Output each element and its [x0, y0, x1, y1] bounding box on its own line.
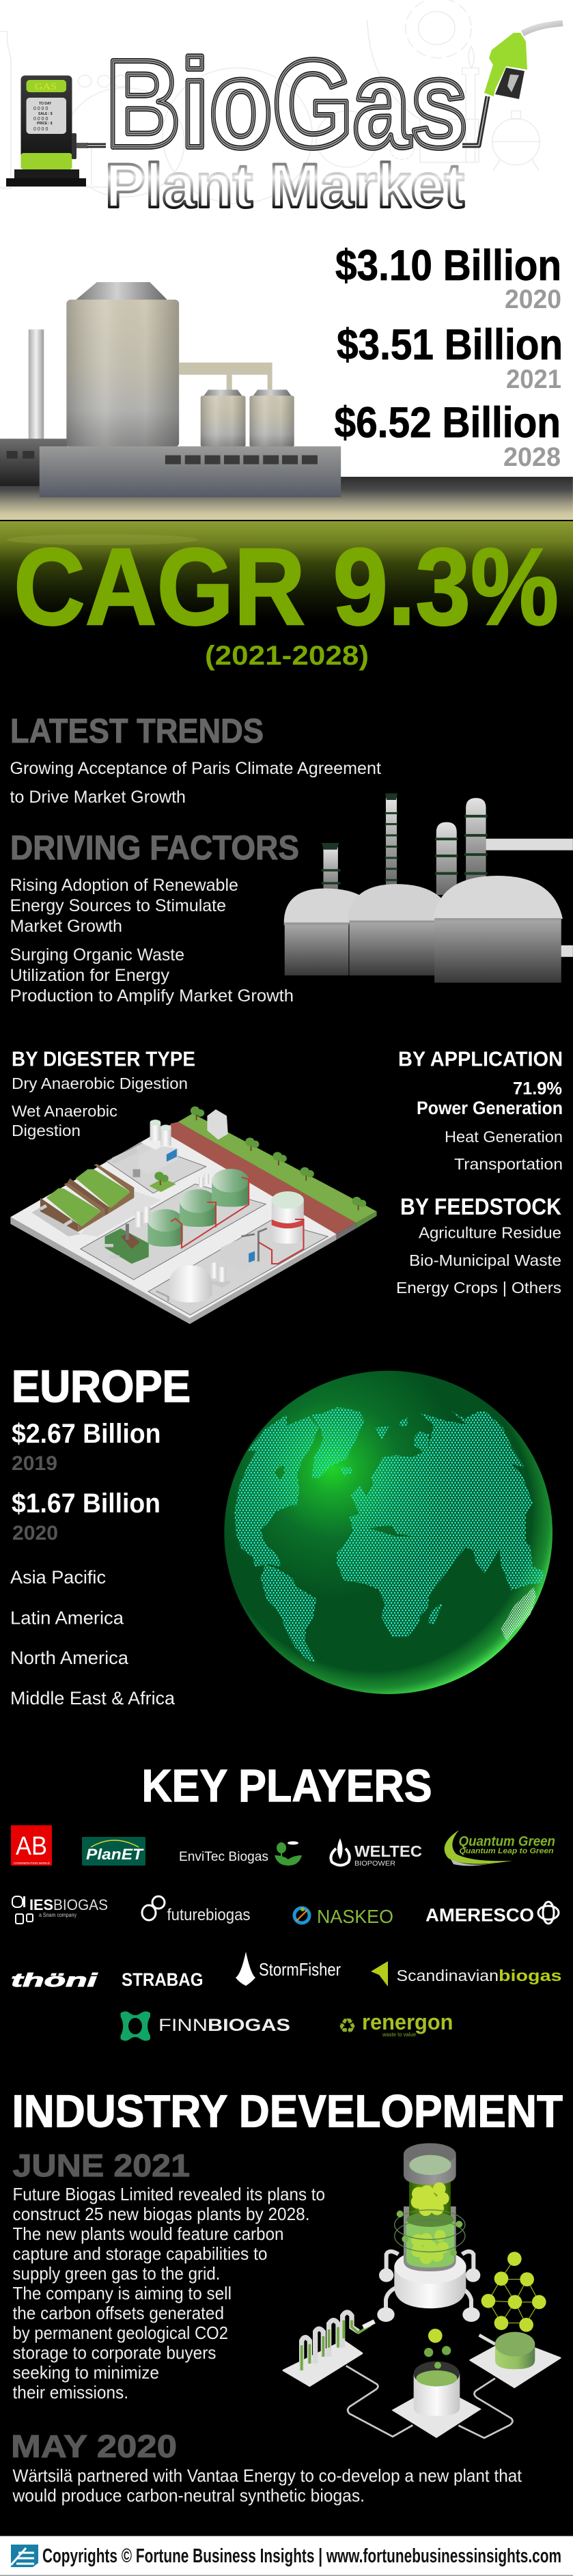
- stat: 2020 value: 2020: [505, 285, 561, 314]
- stat: Europe 2019: 2019: [12, 1452, 57, 1475]
- text: June 2021 development: [12, 2184, 325, 2402]
- logo: EnviTec Biogas: EnviTec Biogas: [179, 1850, 268, 1864]
- logo: IES Biogas: IES: [29, 1896, 53, 1913]
- logo: Quantum Green: Quantum Leap to Green: [459, 1847, 554, 1855]
- logo: Weltec Biopower: WELTEC: [354, 1842, 422, 1860]
- list: other applications: [445, 1128, 563, 1173]
- trees: [154, 1107, 366, 1210]
- list: other regions: North America: [10, 1648, 129, 1668]
- heading: by digester type: BY DIGESTER TYPE: [12, 1047, 195, 1071]
- logo: Renergon: renergon: [362, 2010, 453, 2034]
- list: feedstocks: Bio-Municipal Waste: [409, 1251, 561, 1269]
- heading: Europe: EUROPE: [12, 1361, 191, 1411]
- text: June 2021 development: storage to corporate buyers: [12, 2342, 216, 2363]
- panel: driving factors: [10, 829, 299, 1006]
- logo: StormFisher: [236, 1952, 341, 1986]
- text: June 2021 development: their emissions.: [12, 2382, 128, 2402]
- text: factor two: [10, 945, 294, 1006]
- logo: Future Biogas: futurebiogas: [167, 1906, 250, 1924]
- logo: FinnBiogas: FINN: [158, 2016, 208, 2035]
- storage tank and pipes: [156, 1191, 304, 1303]
- panel: Europe regional: [10, 1361, 191, 1708]
- beaker on plate: [391, 2329, 481, 2438]
- heading: May 2020: MAY 2020: [11, 2428, 177, 2464]
- logo: IES Biogas: BIOGAS: [53, 1896, 108, 1913]
- heading: latest trends: LATEST TRENDS: [10, 712, 264, 750]
- reactor: [377, 2143, 480, 2322]
- icon: gas pump: 0 0 0 0: [33, 117, 48, 122]
- stat: Europe 2019: [12, 1419, 161, 1475]
- text: forecast period: (2021-2028): [205, 641, 369, 671]
- text: June 2021 development: supply green gas to the grid.: [12, 2263, 220, 2284]
- list: digester types: Wet Anaerobic: [12, 1103, 117, 1120]
- logo: Strabag: STRABAG: [122, 1969, 204, 1990]
- icon: Fortune Business Insights logo: [11, 2545, 38, 2567]
- list: other regions: [10, 1567, 176, 1708]
- digester tanks: [40, 1169, 249, 1264]
- panel: by application: [398, 1047, 563, 1173]
- text: May 2020 development: [12, 2465, 522, 2506]
- icon: fuel hose: [87, 96, 488, 146]
- heading: Plant Market: Plant Market: [105, 152, 464, 221]
- green tank on plate: [470, 2332, 561, 2387]
- text: June 2021 development: capture and storage capabilities to: [12, 2243, 268, 2264]
- logo: Ameresco: [425, 1902, 559, 1925]
- panel: by digester type: [12, 1047, 195, 1139]
- text: June 2021 development: Future Biogas Limited revealed its plans to: [12, 2184, 325, 2204]
- text: trend description: Growing Acceptance of Paris Climate Agreement: [10, 759, 381, 778]
- logo: FinnBiogas: [120, 2011, 290, 2041]
- icon: fuel nozzle: [484, 23, 563, 99]
- stat: 2021 value: [337, 321, 563, 394]
- U-tube stand: [283, 2312, 374, 2386]
- logo: Scandinavian Biogas: biogas: [499, 1967, 561, 1984]
- list: feedstocks: Agriculture Residue: [419, 1224, 561, 1242]
- icon: gas pump: 0 0 0 0: [33, 107, 48, 111]
- illustration: green dotted globe: [224, 1371, 553, 1694]
- logo: Renergon: ♻: [338, 2014, 357, 2038]
- logo: Scandinavian Biogas: [371, 1961, 561, 1986]
- stat: Europe 2020: $1.67 Billion: [12, 1488, 160, 1519]
- list: other regions: Latin America: [10, 1608, 124, 1629]
- stat: power generation share: Power Generation: [417, 1098, 563, 1118]
- list: digester types: [12, 1075, 188, 1139]
- icon: gas pump: PRICE : $: [37, 122, 53, 126]
- text: factor two: Utilization for Energy: [10, 966, 170, 985]
- logo: AB: COGENERATION WORLD: [14, 1861, 51, 1865]
- list: digester types: Digestion: [12, 1122, 81, 1139]
- icon: gas pump: [6, 75, 88, 186]
- heading: key players: KEY PLAYERS: [142, 1760, 432, 1812]
- icon: gas pump: 0 0 0 0: [33, 127, 48, 132]
- panel: latest trends: [10, 712, 381, 807]
- background line art: [0, 0, 541, 204]
- service building: [115, 1109, 228, 1192]
- text: June 2021 development: by permanent geological CO2: [12, 2323, 228, 2343]
- text: June 2021 development: The company is aiming to sell: [12, 2283, 232, 2303]
- stat: 2028 value: [335, 399, 561, 472]
- text: May 2020 development: Wärtsilä partnered with Vantaa Energy to co-develop a new plant that: [12, 2465, 522, 2486]
- panel: market size values: [335, 242, 563, 472]
- text: June 2021 development: The new plants would feature carbon: [12, 2224, 284, 2244]
- list: digester types: Dry Anaerobic Digestion: [12, 1075, 188, 1092]
- panel: header title: [0, 0, 563, 221]
- logo: FinnBiogas: BIOGAS: [208, 2016, 290, 2035]
- logo: StormFisher: StormFisher: [259, 1959, 341, 1980]
- heading: by application: BY APPLICATION: [398, 1047, 563, 1071]
- illustration: isometric biogas plant: [10, 1107, 377, 1324]
- list: feedstocks: Energy Crops | Others: [396, 1279, 561, 1297]
- list: other regions: Middle East & Africa: [10, 1688, 176, 1708]
- heading: driving factors: DRIVING FACTORS: [10, 829, 299, 867]
- stat: 2028 value: 2028: [503, 443, 561, 472]
- heading: BioGas: BioGas: [106, 33, 468, 174]
- text: factor one: [10, 876, 238, 936]
- stat: Europe 2020: [12, 1488, 160, 1545]
- list: other regions: Asia Pacific: [10, 1567, 106, 1588]
- text: trend description: [10, 759, 381, 807]
- stat: 2020 value: [335, 242, 561, 314]
- logo: AB: AB: [16, 1832, 47, 1861]
- filter beds: [40, 1164, 134, 1232]
- molecule network: [481, 2252, 546, 2332]
- logo: Scandinavian Biogas: Scandinavian: [396, 1967, 499, 1984]
- heading: June 2021: JUNE 2021: [12, 2148, 190, 2183]
- stat: power generation share: [417, 1078, 563, 1118]
- logo: Quantum Green: Quantum Green: [459, 1834, 555, 1849]
- logo: Renergon: waste to value: [382, 2032, 417, 2038]
- icon: gas pump: GAS: [35, 82, 57, 92]
- logo: Thoni: thöni: [11, 1969, 98, 1991]
- logo: AB: [11, 1825, 52, 1866]
- logo: Ameresco: AMERESCO: [425, 1905, 534, 1925]
- text: trend description: to Drive Market Growth: [10, 788, 186, 807]
- logo: PlanET: [82, 1837, 145, 1866]
- logo: IES Biogas: [12, 1896, 108, 1924]
- text: factor one: Energy Sources to Stimulate: [10, 896, 226, 915]
- stat: 2021 value: 2021: [506, 365, 561, 394]
- list: other applications: Transportation: [454, 1155, 563, 1173]
- logo: Renergon: [338, 2010, 453, 2038]
- text: June 2021 development: construct 25 new biogas plants by 2028.: [12, 2204, 310, 2224]
- heading: BioGas: BioGas: [106, 33, 468, 174]
- logo: Weltec Biopower: BIOPOWER: [354, 1860, 395, 1868]
- panel: CAGR: [0, 521, 573, 671]
- text: factor two: Surging Organic Waste: [10, 945, 184, 965]
- illustration: biogas factory: [0, 282, 573, 520]
- text: June 2021 development: seeking to minimize: [12, 2362, 159, 2383]
- stat: Europe 2019: $2.67 Billion: [12, 1419, 161, 1449]
- text: factor one: Market Growth: [10, 917, 122, 936]
- list: other applications: Heat Generation: [445, 1128, 563, 1146]
- logo: PlanET: PlanET: [86, 1846, 144, 1863]
- icon: gas pump: SALE : $: [38, 112, 53, 116]
- logo: Naskeo: NASKEO: [317, 1906, 393, 1927]
- heading: BioGas: BioGas: [106, 33, 468, 174]
- logo: Weltec Biopower: [331, 1838, 422, 1868]
- logo: Future Biogas: [142, 1896, 250, 1924]
- stat: power generation share: 71.9%: [513, 1078, 562, 1098]
- logo: EnviTec Biogas: [179, 1842, 302, 1866]
- cables: [346, 2366, 512, 2438]
- list: feedstocks: [396, 1224, 561, 1297]
- stat: Europe 2020: 2020: [12, 1522, 58, 1545]
- panel: by feedstock: [396, 1194, 561, 1297]
- text: June 2021 development: the carbon offsets generated: [12, 2303, 224, 2323]
- panel: industry development: [11, 2086, 563, 2506]
- illustration: gas holders and chimneys: [284, 793, 573, 983]
- logo: Quantum Green: [445, 1830, 555, 1866]
- panel: footer: [0, 2536, 573, 2576]
- text: May 2020 development: would produce carbon-neutral synthetic biogas.: [12, 2485, 365, 2506]
- logo: IES Biogas: a Snam company: [39, 1912, 76, 1918]
- panel: key players: [11, 1760, 561, 2041]
- icon: gas pump: TO DAY: [39, 102, 52, 106]
- text: factor one: Rising Adoption of Renewable: [10, 876, 238, 895]
- text: factor two: Production to Amplify Market Growth: [10, 986, 294, 1006]
- illustration: laboratory bioreactor: [283, 2143, 561, 2438]
